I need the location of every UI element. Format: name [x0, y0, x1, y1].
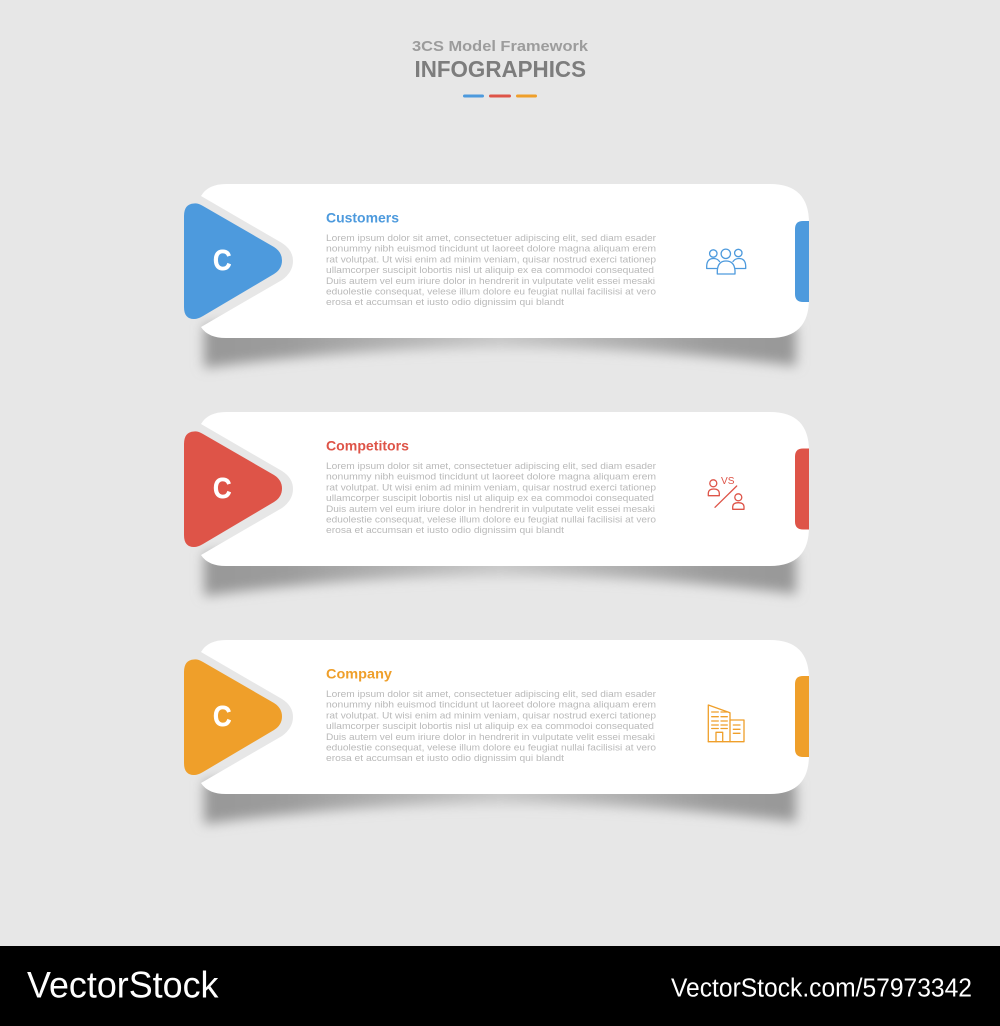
triangle badge	[184, 659, 282, 775]
body text: ullamcorper suscipit lobortis nisl ut aliquip ex ea commodoi consequated	[326, 492, 654, 503]
body text: Duis autem vel eum iriure dolor in hendrerit in vulputate velit essei mesaki	[326, 731, 655, 742]
body text: erosa et accumsan et iusto odio dignissim qui blandt	[326, 752, 564, 763]
badge letter: C	[213, 701, 232, 733]
body text: Lorem ipsum dolor sit amet, consectetuer adipiscing elit, sed diam esader	[326, 460, 656, 471]
body text: nonummy nibh euismod tincidunt ut laoreet dolore magna aliquam erem	[326, 699, 656, 710]
white card with notch	[201, 184, 809, 338]
white card with notch	[201, 412, 809, 566]
body text	[326, 232, 656, 307]
icon: person versus person	[708, 476, 744, 509]
body text: nonummy nibh euismod tincidunt ut laoreet dolore magna aliquam erem	[326, 243, 656, 254]
body text: rat volutpat. Ut wisi enim ad minim veniam, quisar nostrud exerci tationep	[326, 253, 656, 264]
card shadow	[204, 781, 796, 824]
body text: rat volutpat. Ut wisi enim ad minim veniam, quisar nostrud exerci tationep	[326, 481, 656, 492]
colour key dashes	[463, 94, 537, 98]
body text: Lorem ipsum dolor sit amet, consectetuer adipiscing elit, sed diam esader	[326, 688, 656, 699]
panel: competitors	[184, 412, 809, 596]
body text: Duis autem vel eum iriure dolor in hendrerit in vulputate velit essei mesaki	[326, 503, 655, 514]
triangle badge	[184, 431, 282, 547]
body text: erosa et accumsan et iusto odio dignissim qui blandt	[326, 296, 564, 307]
side tab	[795, 676, 809, 757]
side tab	[795, 448, 809, 530]
white card with notch	[201, 640, 809, 794]
subtitle: 3CS Model Framework	[412, 38, 589, 55]
body text: rat volutpat. Ut wisi enim ad minim veniam, quisar nostrud exerci tationep	[326, 709, 656, 720]
triangle badge	[184, 203, 282, 319]
body text: ullamcorper suscipit lobortis nisl ut aliquip ex ea commodoi consequated	[326, 264, 654, 275]
badge letter: C	[213, 473, 232, 505]
heading: Company	[326, 666, 393, 682]
heading: Competitors	[326, 438, 409, 454]
panel: company	[184, 640, 809, 824]
icon: office buildings	[708, 705, 744, 742]
main title: INFOGRAPHICS	[414, 56, 586, 82]
body text	[326, 688, 656, 763]
body text: eduolestie consequat, velese illum dolore eu feugiat nullai facilisisi at vero	[326, 742, 656, 752]
card shadow	[204, 553, 796, 596]
header: title block	[412, 38, 589, 98]
body text	[326, 460, 656, 535]
body text: Duis autem vel eum iriure dolor in hendrerit in vulputate velit essei mesaki	[326, 275, 655, 286]
footer url text: VectorStock.com/57973342	[671, 975, 972, 1003]
icon: person versus person: VS	[721, 476, 735, 487]
footer logo text: VectorStock	[27, 964, 219, 1006]
badge letter: C	[213, 245, 232, 277]
body text: eduolestie consequat, velese illum dolore eu feugiat nullai facilisisi at vero	[326, 286, 656, 296]
footer: watermark bar	[0, 946, 1000, 1026]
icon: group of people	[707, 249, 746, 274]
body text: erosa et accumsan et iusto odio dignissim qui blandt	[326, 524, 564, 535]
body text: Lorem ipsum dolor sit amet, consectetuer adipiscing elit, sed diam esader	[326, 232, 656, 243]
body text: ullamcorper suscipit lobortis nisl ut aliquip ex ea commodoi consequated	[326, 720, 654, 731]
body text: nonummy nibh euismod tincidunt ut laoreet dolore magna aliquam erem	[326, 471, 656, 482]
side tab	[795, 221, 809, 302]
heading: Customers	[326, 210, 399, 226]
panel: customers	[184, 184, 809, 368]
card shadow	[204, 325, 796, 368]
body text: eduolestie consequat, velese illum dolore eu feugiat nullai facilisisi at vero	[326, 514, 656, 524]
